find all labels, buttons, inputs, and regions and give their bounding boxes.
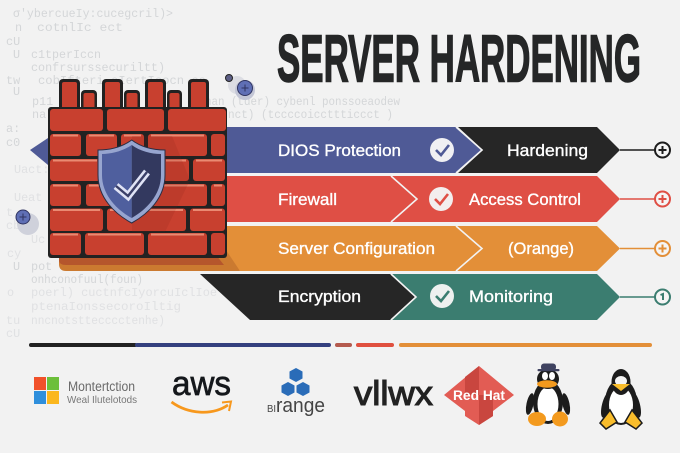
background: faint code text: U — [13, 48, 20, 62]
background: faint code text: cy — [7, 247, 21, 261]
background: faint code text: a: — [6, 122, 20, 136]
wall mortar — [48, 107, 227, 258]
background: faint code text: n — [15, 21, 22, 35]
background: faint code text: U — [13, 260, 20, 274]
merlons — [59, 79, 209, 111]
connector node black — [620, 142, 670, 158]
connector node red — [620, 192, 670, 206]
background: faint code text: tu — [6, 314, 20, 328]
background: faint code text: ptenaIonssecoroIltig — [31, 300, 181, 314]
row 2: Firewall / Access Control — [226, 176, 670, 222]
background: faint code text: pot — [31, 260, 52, 274]
connector node orange — [620, 241, 670, 256]
icon: check badge teal — [430, 284, 454, 308]
background: faint code text: cU — [6, 327, 20, 341]
background: faint code text: nct) (tccccoiccttticcct ) — [228, 108, 393, 122]
background: faint code text: Uc — [31, 233, 45, 247]
logo: Microsoft style — [34, 377, 137, 406]
label: Monitoring: Monitoring — [469, 287, 553, 306]
label: Hardening: Hardening — [507, 141, 588, 160]
connector node teal — [620, 290, 670, 304]
bricks — [50, 109, 226, 255]
background: faint code text: c0 — [6, 136, 20, 150]
label: Encryption: Encryption — [278, 287, 361, 306]
background: faint code text: nncnotsttecccctenhe) — [31, 314, 165, 328]
decorative pin left — [16, 210, 39, 235]
icon: check badge red — [429, 187, 453, 211]
background: faint code text — [6, 7, 400, 341]
background: faint code text: t — [6, 206, 13, 220]
background: faint code text: Ueat — [14, 191, 42, 205]
row 4: Encryption / Monitoring — [200, 274, 670, 320]
icon: check badge blue — [430, 138, 454, 162]
label: Firewall: Firewall — [278, 190, 337, 209]
logo: aws: aws — [172, 365, 231, 403]
background: faint code text: cobIfteri eIertIoocn ca — [38, 74, 206, 88]
background: faint code text: cU — [6, 35, 20, 49]
segmented divider — [29, 343, 652, 347]
logo: Red Hat: Red Hat — [453, 388, 506, 403]
background: faint code text: onhconofuul(foun) — [31, 273, 143, 287]
label: Access Control: Access Control — [469, 190, 581, 209]
icon: shield with check — [98, 140, 165, 223]
background: faint code text: σ'ybercueIy:cucegcril)> — [13, 7, 173, 21]
background: faint code text: tw — [6, 74, 20, 88]
background: faint code text: na — [32, 108, 46, 122]
logo: Red Hat — [444, 366, 514, 425]
logo: penguin with hat — [524, 364, 572, 426]
row 3: Server Configuration / (Orange) — [59, 226, 670, 271]
background: faint code text: han (tder) cybenl ponssoeaodew — [205, 95, 400, 109]
background: faint code text: c1tperIccn — [31, 48, 101, 62]
label: Server Configuration: Server Configuration — [278, 239, 435, 258]
logo: hexagon Brange: BIrange — [267, 395, 325, 417]
background: faint code text: confrsurssecuriltt) — [31, 61, 165, 75]
background: faint code text: U — [13, 85, 20, 99]
logo: vllwx: vllwx — [354, 375, 433, 413]
background: faint code text: cb — [6, 219, 20, 233]
decorative pin top — [226, 74, 255, 100]
logo: hexagon Brange — [267, 368, 325, 417]
background: faint code text: cotnlIc ect — [37, 21, 123, 35]
logo: penguin — [599, 369, 643, 429]
background: faint code text: o — [7, 286, 14, 300]
logo: Microsoft style: Montertction — [68, 379, 135, 394]
background: faint code text: poerl) cuctnfcIyorcuIclIoe — [31, 286, 217, 300]
label: (Orange): (Orange) — [508, 239, 574, 258]
background: faint code text: p11 — [32, 95, 53, 109]
background: faint code text: Uact: — [14, 163, 49, 177]
row 1: DIOS Protection / Hardening — [30, 127, 670, 173]
label: DIOS Protection: DIOS Protection — [278, 141, 401, 160]
logo: Microsoft style: Weal Ilutelotods — [67, 394, 137, 406]
firewall brick wall — [48, 79, 227, 258]
